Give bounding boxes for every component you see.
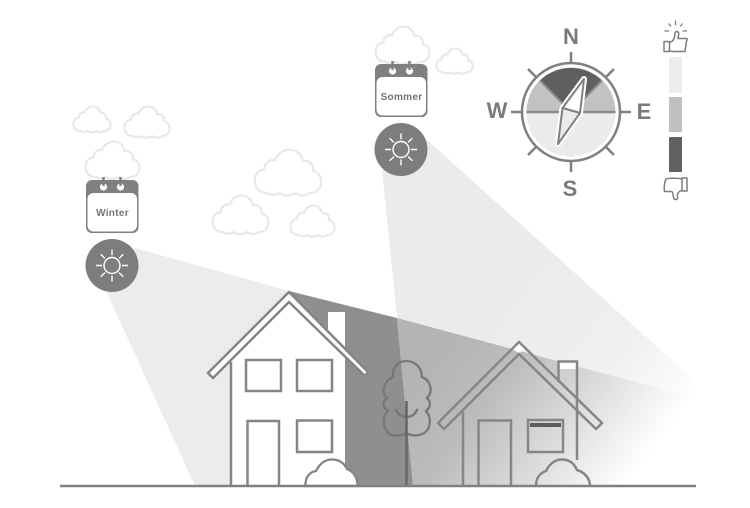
label S: S — [563, 176, 577, 201]
legend: poor — [669, 137, 682, 172]
window blind — [530, 423, 561, 427]
cloud — [73, 106, 111, 132]
tree — [384, 361, 431, 486]
label N: N — [563, 24, 579, 49]
rating legend — [669, 57, 682, 172]
legend: good — [669, 57, 682, 93]
rating zone: north sector — [540, 68, 602, 112]
label E: E — [637, 99, 651, 124]
bush at right house — [536, 460, 590, 486]
cloud — [436, 48, 473, 74]
summer calendar — [375, 61, 428, 117]
winter sunlight beam — [107, 248, 289, 486]
bush at left house — [305, 460, 358, 486]
winter sun icon — [86, 239, 138, 292]
cloud — [86, 142, 139, 179]
summer sun icon — [374, 123, 428, 176]
summer sunlight beam — [382, 140, 695, 398]
rating zone: side sectors — [526, 68, 616, 112]
label W: W — [487, 98, 508, 123]
icon: thumb down — [664, 178, 687, 200]
cloud — [290, 206, 335, 237]
calendar label: Sommer: Sommer — [381, 92, 422, 103]
compass — [487, 24, 651, 201]
cloud — [255, 150, 321, 195]
compass dial — [522, 63, 620, 161]
compass ticks — [511, 52, 631, 172]
cloud — [376, 27, 429, 64]
cloud — [124, 107, 170, 138]
house left (two storeys, white) — [208, 292, 368, 486]
calendar label: Winter: Winter — [96, 208, 129, 219]
house right (outlined, in shadow) — [438, 342, 602, 486]
cloud — [213, 196, 268, 234]
legend: medium — [669, 97, 682, 132]
house shadow, overlap with summer beam — [397, 318, 695, 486]
house shadow, dark part — [289, 291, 413, 486]
ground line — [60, 485, 696, 487]
winter calendar — [86, 177, 138, 233]
rating zone: lower half — [526, 112, 616, 156]
icon: thumb up — [664, 20, 687, 52]
compass needle — [558, 79, 584, 144]
